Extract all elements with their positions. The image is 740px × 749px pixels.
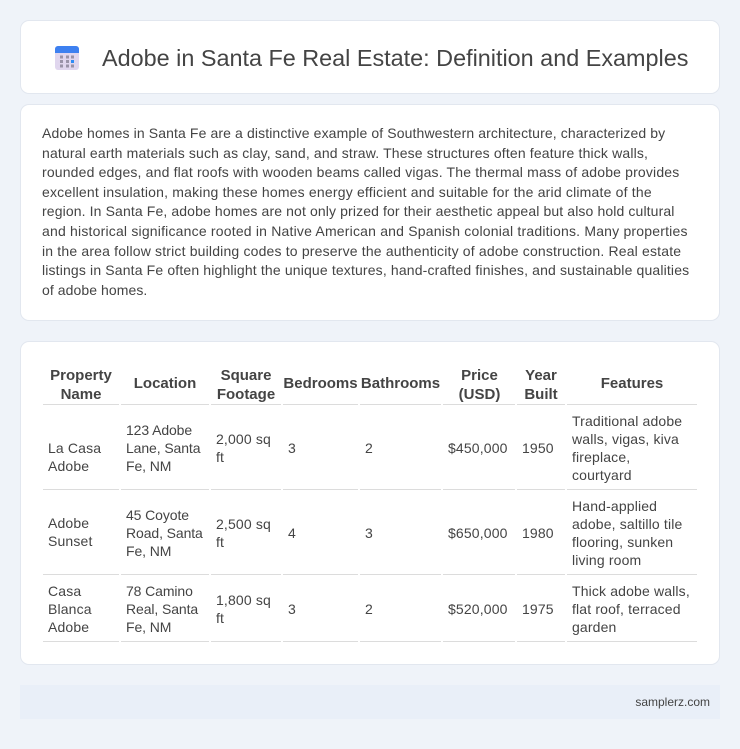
table row: Casa Blanca Adobe: Blanca	[48, 601, 92, 617]
table row: Adobe Sunset: ft	[216, 534, 224, 550]
table row: Adobe Sunset: Hand-applied	[572, 498, 657, 514]
header panel	[20, 20, 720, 94]
table row: Casa Blanca Adobe	[43, 583, 697, 642]
table header: Bedrooms	[283, 375, 358, 392]
table row: Casa Blanca Adobe: 1,800 sq	[216, 592, 271, 608]
footer bar	[20, 685, 720, 719]
description text: excellent insulation, making these homes energy efficient and suitable for the arid climate of the	[42, 184, 652, 200]
table row: Adobe Sunset: Fe, NM	[126, 543, 171, 559]
table row: La Casa Adobe: courtyard	[572, 467, 632, 483]
table row: Casa Blanca Adobe: Real, Santa	[126, 601, 198, 617]
panel: description	[20, 104, 720, 321]
table row: Adobe Sunset: Adobe	[48, 515, 89, 531]
table row: Casa Blanca Adobe: Thick adobe walls,	[572, 583, 690, 599]
table row: La Casa Adobe: ft	[216, 449, 224, 465]
description text: and historical significance rooted in Native American and Spanish colonial traditions. Many properties	[42, 223, 688, 239]
description text: in the area follow strict building codes to preserve the authenticity of adobe construction. Real estate	[42, 243, 681, 259]
table row: Adobe Sunset	[43, 498, 697, 575]
table row: La Casa Adobe: 3	[288, 440, 296, 456]
table row: La Casa Adobe	[43, 413, 697, 490]
icon: calendar	[55, 46, 79, 70]
table row: Adobe Sunset: $650,000	[448, 525, 508, 541]
table row: Casa Blanca Adobe: flat roof, terraced	[572, 601, 681, 617]
table row: Casa Blanca Adobe: $520,000	[448, 601, 508, 617]
table row: Adobe Sunset: 2,500 sq	[216, 516, 271, 532]
table row: La Casa Adobe: La Casa	[48, 440, 101, 456]
table row: Casa Blanca Adobe: 78 Camino	[126, 583, 193, 599]
table row: Adobe Sunset: 1980	[522, 525, 554, 541]
table row: Adobe Sunset: Road, Santa	[126, 525, 203, 541]
table header: Year	[525, 366, 557, 384]
table row: Casa Blanca Adobe: garden	[572, 619, 616, 635]
description text: region. In Santa Fe, adobe homes are not only prized for their aesthetic appeal but also hold cultural	[42, 203, 675, 219]
table row: Adobe Sunset: 4	[288, 525, 296, 541]
table row: Casa Blanca Adobe: 3	[288, 601, 296, 617]
table row: La Casa Adobe: 2,000 sq	[216, 431, 271, 447]
table row: Casa Blanca Adobe: Casa	[48, 583, 81, 599]
table header: Location	[134, 375, 196, 392]
description text: listings in Santa Fe often highlight the unique textures, hand-crafted finishes, and sustainable qualities	[42, 262, 689, 278]
table header: Built	[524, 386, 558, 402]
table row: La Casa Adobe: walls, vigas, kiva	[572, 431, 679, 447]
title: Adobe in Santa Fe Real Estate: Definition and Examples	[102, 45, 688, 71]
table row: La Casa Adobe: fireplace,	[572, 449, 630, 465]
table row: La Casa Adobe: Fe, NM	[126, 458, 171, 474]
table row: Casa Blanca Adobe: Fe, NM	[126, 619, 171, 635]
table header: Price	[461, 366, 498, 384]
table row: La Casa Adobe: 123 Adobe	[126, 422, 192, 438]
table row: Adobe Sunset: Sunset	[48, 533, 92, 549]
table row: La Casa Adobe: $450,000	[448, 440, 508, 456]
table row: Adobe Sunset: adobe, saltillo tile	[572, 516, 682, 532]
table row: La Casa Adobe: Traditional adobe	[572, 413, 682, 429]
table header	[43, 366, 697, 405]
table row: La Casa Adobe: 1950	[522, 440, 554, 456]
table row: Casa Blanca Adobe: 1975	[522, 601, 554, 617]
table header: (USD)	[459, 386, 500, 402]
table row: Adobe Sunset: 3	[365, 525, 373, 541]
table row: Casa Blanca Adobe: 2	[365, 601, 373, 617]
panel: property table	[20, 341, 720, 665]
footer source text: samplerz.com	[635, 695, 710, 709]
table header: Name	[61, 386, 101, 402]
table header: Square	[221, 366, 271, 384]
table row: La Casa Adobe: 2	[365, 440, 373, 456]
table header: Property	[50, 366, 112, 384]
table row: Casa Blanca Adobe: Adobe	[48, 619, 89, 635]
description text	[42, 125, 689, 298]
description text: of adobe homes.	[42, 282, 147, 298]
table header: Footage	[217, 386, 275, 402]
table row: Adobe Sunset: flooring, sunken	[572, 534, 673, 550]
table header: Features	[601, 375, 663, 392]
table row: Adobe Sunset: 45 Coyote	[126, 507, 189, 523]
table row: Adobe Sunset: living room	[572, 552, 641, 568]
table row: La Casa Adobe: Lane, Santa	[126, 440, 200, 456]
table row: Casa Blanca Adobe: ft	[216, 610, 224, 626]
description text: natural earth materials such as clay, sand, and straw. These structures often feature thick walls,	[42, 145, 648, 161]
description text: rounded edges, and flat roofs with wooden beams called vigas. The thermal mass of adobe provides	[42, 164, 679, 180]
description text: Adobe homes in Santa Fe are a distinctive example of Southwestern architecture, characterized by	[42, 125, 665, 141]
table row: La Casa Adobe: Adobe	[48, 458, 89, 474]
table header: Bathrooms	[361, 375, 440, 392]
